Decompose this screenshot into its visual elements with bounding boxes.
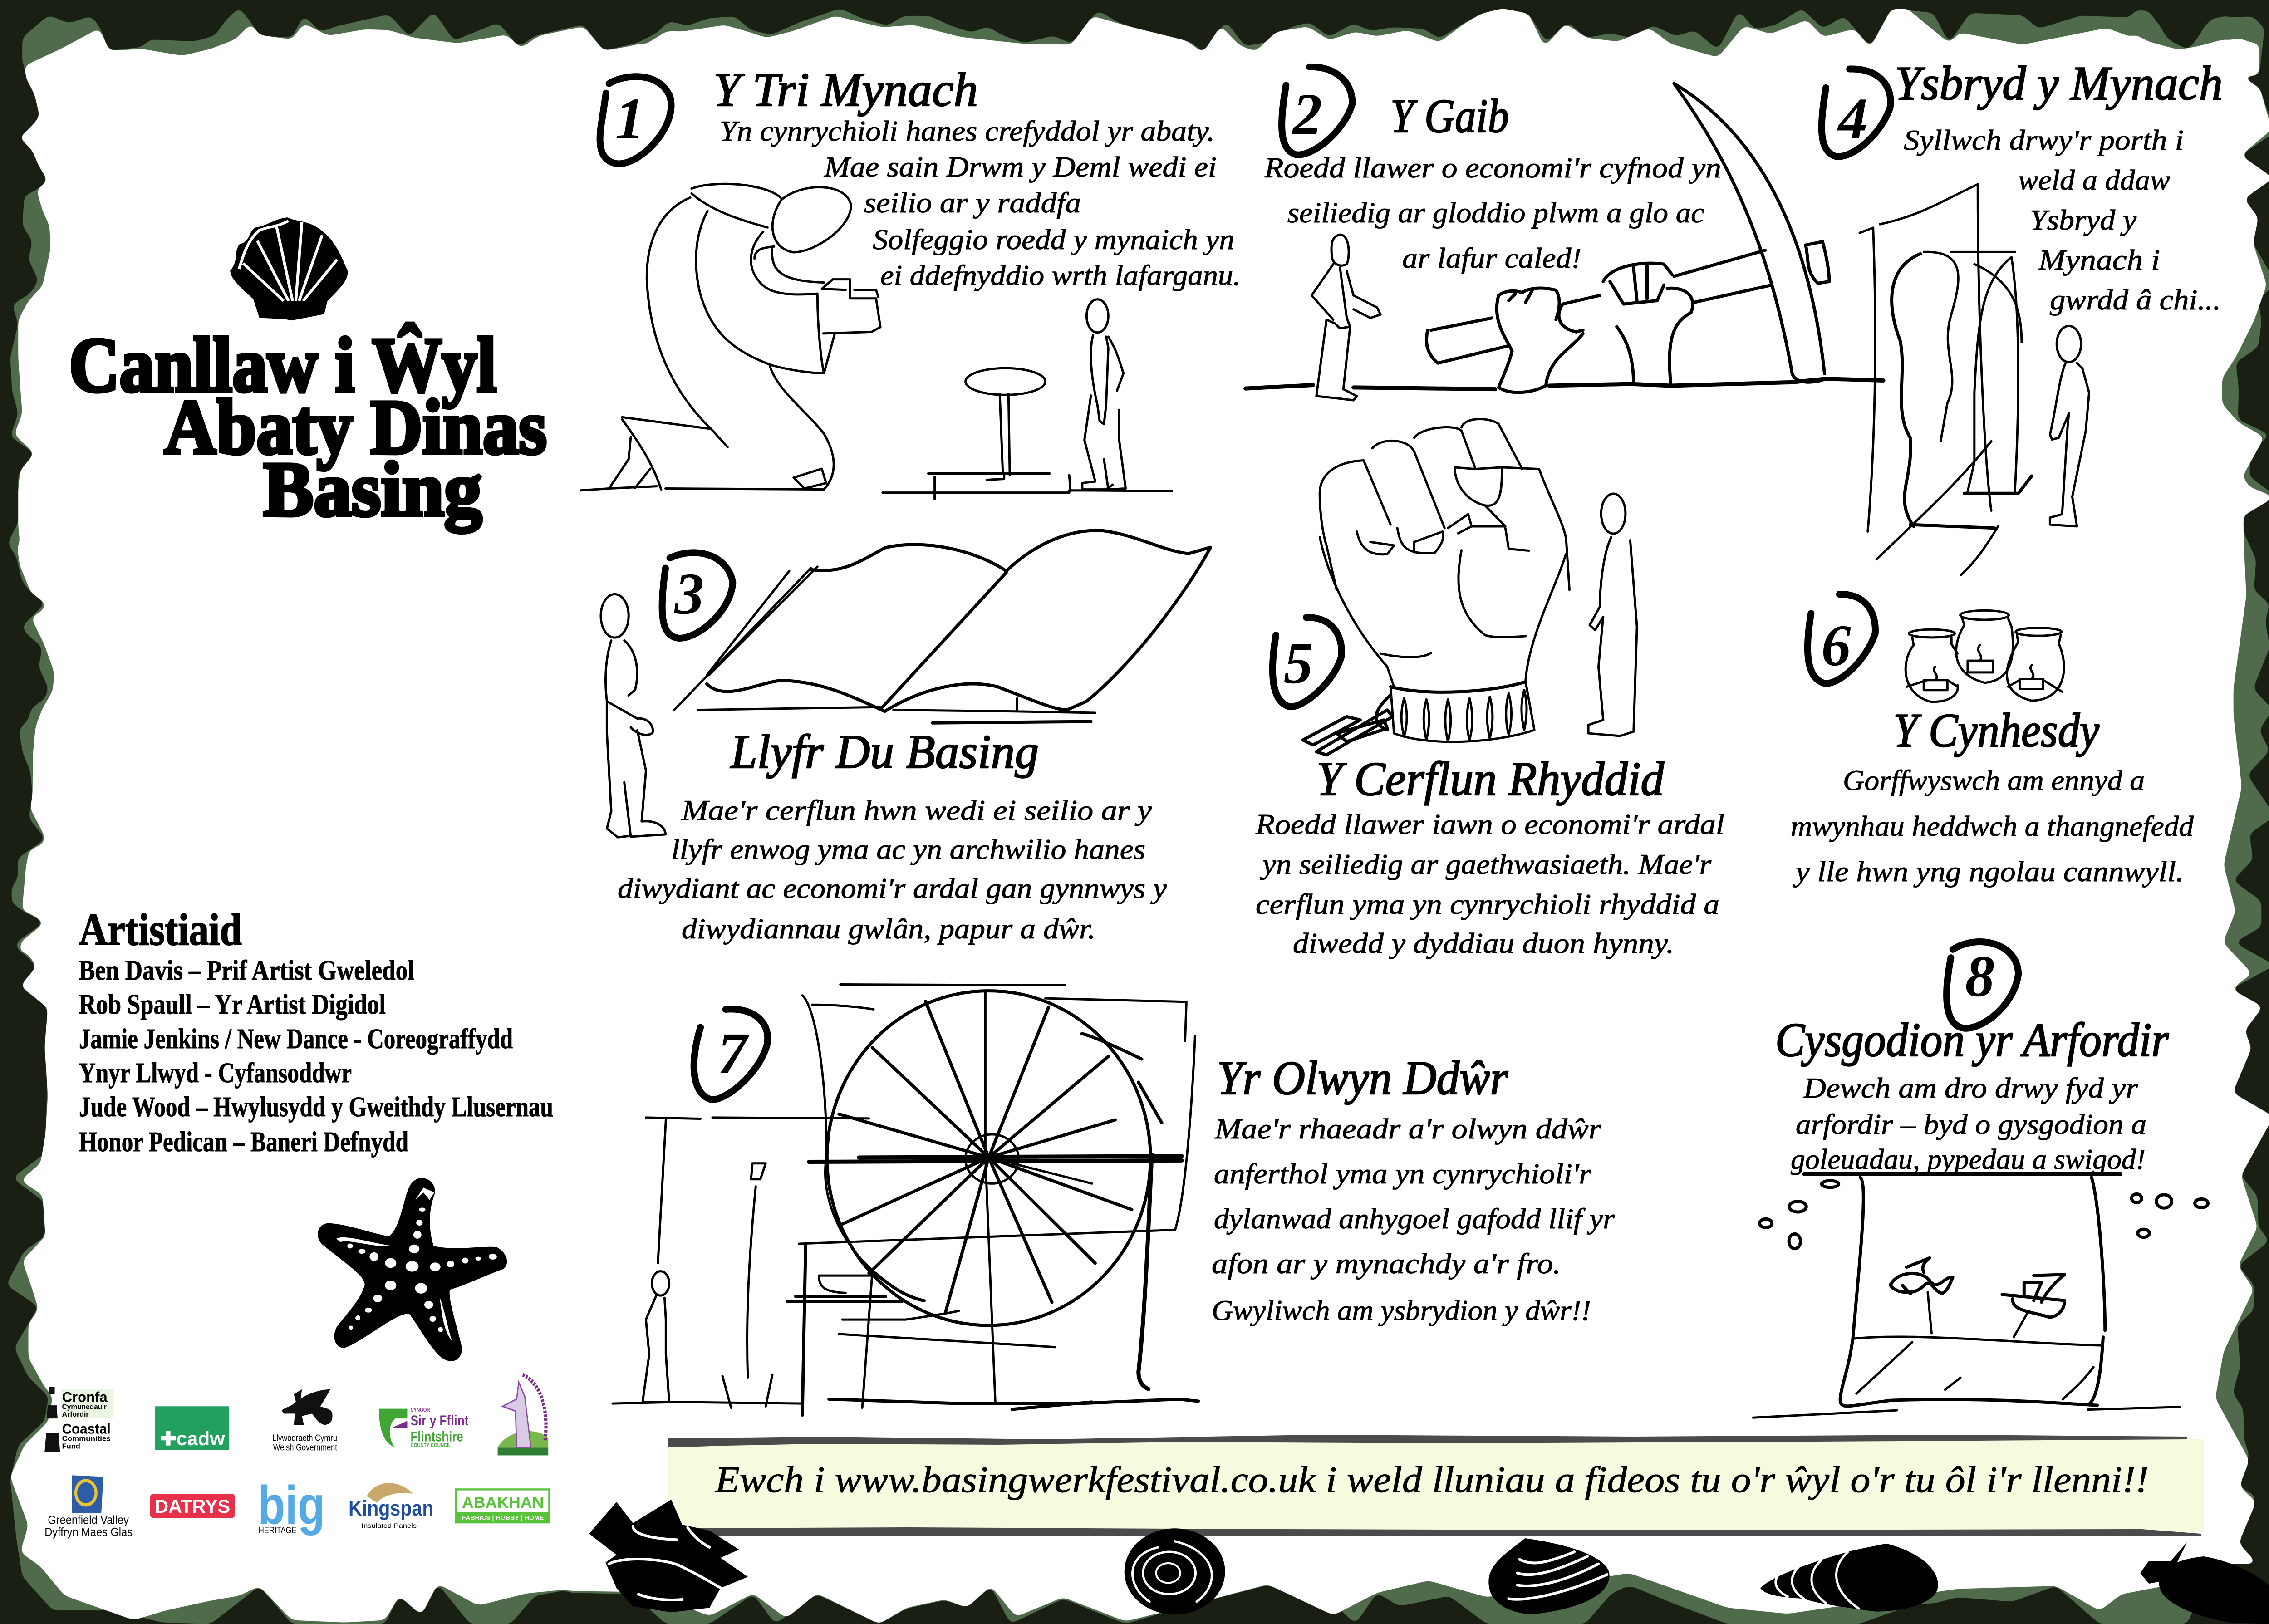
body text: mwynhau heddwch a thangnefedd [1791, 810, 2194, 842]
panel 4: Ysbryd y Mynach [1822, 57, 2223, 575]
artists list: Ynyr Llwyd - Cyfansoddwr [79, 1058, 352, 1089]
sketch: water wheel and visitor [613, 985, 1198, 1415]
panel 8: Cysgodion yr Arfordir [1753, 942, 2208, 1418]
body text [1791, 764, 2194, 888]
body text: Gwyliwch am ysbrydion y dŵr!! [1212, 1294, 1591, 1326]
logo: Coastal Communities Fund: Cymunedau'r [62, 1403, 107, 1411]
panel 2: Y Gaib [1246, 67, 1883, 400]
number badge 3 [662, 553, 733, 638]
number badge 8 [1947, 942, 2019, 1028]
panel 5: Y Cerflun Rhyddid [1255, 419, 1724, 959]
artists list: Artistiaid [79, 904, 242, 955]
sketch: three candle jars [1906, 610, 2064, 702]
logo: Cadw [155, 1406, 229, 1450]
artists list: Jude Wood – Hwylusydd y Gweithdy Llusernau [79, 1092, 553, 1123]
title: Abaty Dinas [164, 384, 547, 471]
body text: Mae sain Drwm y Deml wedi ei [824, 151, 1217, 183]
number badge 3: 3 [673, 561, 704, 627]
body text: Mynach i [2038, 244, 2160, 276]
sketch: kneeling monk, singing bowl and visitor [581, 184, 1172, 499]
sketch: ghost in portal and visitor [1860, 184, 2089, 575]
icon: spiked conch shell [589, 1500, 748, 1612]
artists list: Jamie Jenkins / New Dance - Coreograffydd [79, 1024, 513, 1055]
heading: Llyfr Du Basing [730, 725, 1039, 778]
number badge 6: 6 [1822, 613, 1851, 678]
body text: diwydiannau gwlân, papur a dŵr. [682, 913, 1095, 945]
number badge 4 [1822, 69, 1891, 157]
body text: llyfr enwog yma ac yn archwilio hanes [671, 833, 1145, 865]
body text: seilio ar y raddfa [864, 186, 1081, 219]
number badge 1 [600, 77, 671, 164]
body text: Yn cynrychioli hanes crefyddol yr abaty. [720, 115, 1215, 147]
body text [618, 794, 1167, 945]
logo: Abakhan: FABRICS | HOBBY | HOME [462, 1514, 544, 1521]
logo: Datrys [150, 1494, 235, 1518]
body text [1791, 1072, 2146, 1175]
number badge 7: 7 [718, 1021, 750, 1086]
body text: Gorffwyswch am ennyd a [1843, 764, 2145, 796]
sketch: open book sculpture and visitor [601, 530, 1210, 837]
heading: Y Gaib [1390, 89, 1509, 142]
sketch: wrist shackle, chain and visitor [1303, 494, 1637, 755]
icon: clam shell [1488, 1538, 1610, 1614]
panel 7: Yr Olwyn Ddŵr [613, 985, 1615, 1415]
body text [1212, 1113, 1615, 1326]
body text: Ysbryd y [2030, 204, 2137, 236]
logo: Abakhan [456, 1489, 549, 1522]
heading: Y Tri Mynach [713, 63, 978, 116]
title [69, 322, 547, 533]
title: Basing [263, 446, 482, 533]
body text [1904, 124, 2221, 316]
number badge 2 [1282, 67, 1352, 155]
icon: large shell at corner [2140, 1542, 2269, 1624]
panel 1: Y Tri Mynach [581, 63, 1241, 499]
body text: afon ar y mynachdy a'r fro. [1212, 1247, 1561, 1280]
logo: Welsh Government: Llywodraeth Cymru [272, 1433, 337, 1443]
body text: gwrdd â chi... [2050, 284, 2221, 316]
title: Canllaw i Ŵyl [69, 322, 496, 408]
logo: Welsh Government [272, 1389, 338, 1452]
logo: Greenfield Valley: Greenfield Valley [48, 1514, 129, 1527]
heading: Cysgodion yr Arfordir [1775, 1013, 2169, 1066]
panel 3: Llyfr Du Basing [601, 530, 1210, 945]
logo: Flintshire: Flintshire [411, 1429, 463, 1445]
website banner [668, 1435, 2204, 1536]
body text: goleuadau, pypedau a swigod! [1791, 1143, 2146, 1175]
body text: Dewch am dro drwy fyd yr [1803, 1072, 2138, 1104]
logo: Coastal Communities Fund: Coastal [62, 1421, 111, 1437]
logo: arts figure [498, 1375, 548, 1455]
body text: Mae'r rhaeadr a'r olwyn ddŵr [1214, 1113, 1601, 1145]
body text [1264, 152, 1721, 274]
number badge 8: 8 [1965, 944, 1995, 1009]
body text: Mae'r cerflun hwn wedi ei seilio ar y [681, 794, 1152, 826]
artists list: Rob Spaull – Yr Artist Digidol [79, 989, 386, 1020]
body text: Syllwch drwy'r porth i [1904, 124, 2184, 156]
body text: diwedd y dyddiau duon hynny. [1293, 927, 1674, 959]
body text: Roedd llawer iawn o economi'r ardal [1255, 808, 1724, 840]
body text: yn seiliedig ar gaethwasiaeth. Mae'r [1260, 848, 1712, 880]
logo: Kingspan [349, 1483, 434, 1529]
logo: Cadw: ✚cadw [160, 1428, 225, 1450]
heading: Yr Olwyn Ddŵr [1217, 1051, 1508, 1104]
heading: Y Cynhesdy [1893, 704, 2100, 757]
number badge 7 [694, 1009, 768, 1100]
artists list: Honor Pedican – Baneri Defnydd [79, 1127, 408, 1158]
sketch: shadow puppet tank, fish, boat and bubbles [1753, 1174, 2208, 1418]
body text [720, 115, 1241, 291]
logo: Coastal Communities Fund: Communities [62, 1435, 111, 1443]
artists list: Ben Davis – Prif Artist Gweledol [79, 955, 414, 986]
sketch: clenched fist [1320, 419, 1569, 590]
body text: Roedd llawer o economi'r cyfnod yn [1264, 152, 1721, 184]
logo: Coastal Communities Fund: Fund [62, 1442, 80, 1451]
logo: Flintshire: CYNGOR [411, 1407, 430, 1413]
website banner: Ewch i www.basingwerkfestival.co.uk i weld lluniau a fideos tu o'r ŵyl o'r tu ôl i'r llenni!! [715, 1459, 2149, 1500]
logo: Coastal Communities Fund: Cronfa [62, 1390, 108, 1405]
logo: Big Heritage: big [258, 1475, 325, 1536]
logo: Flintshire [379, 1407, 469, 1449]
body text: cerflun yma yn cynrychioli rhyddid a [1256, 888, 1719, 920]
logo: Big Heritage: HERITAGE [259, 1525, 297, 1535]
number badge 5: 5 [1283, 631, 1313, 696]
logo: Kingspan: Kingspan [349, 1497, 434, 1521]
body text: ei ddefnyddio wrth lafarganu. [880, 259, 1241, 291]
sketch: pickaxe held by fists and visitor [1246, 83, 1883, 400]
body text: dylanwad anhygoel gafodd llif yr [1214, 1202, 1615, 1235]
body text: diwydiant ac economi'r ardal gan gynnwys y [618, 872, 1167, 904]
icon: whelk shell [1760, 1544, 1938, 1612]
number badge 2: 2 [1292, 82, 1322, 147]
logo: Coastal Communities Fund: Arfordir [62, 1411, 89, 1418]
body text: Solfeggio roedd y mynaich yn [873, 223, 1234, 255]
body text: seiliedig ar gloddio plwm a glo ac [1287, 196, 1704, 229]
sponsor logos [44, 1375, 549, 1539]
heading: Y Cerflun Rhyddid [1316, 752, 1665, 805]
logo: Flintshire: Sir y Fflint [411, 1413, 469, 1429]
logo: Kingspan: Insulated Panels [362, 1522, 417, 1529]
logo: Abakhan: ABAKHAN [462, 1494, 544, 1511]
artists list [79, 904, 553, 1158]
number badge 5 [1272, 618, 1341, 707]
body text: arfordir – byd o gysgodion a [1796, 1108, 2146, 1140]
logo: Greenfield Valley: Dyffryn Maes Glas [44, 1526, 133, 1539]
number badge 6 [1807, 594, 1875, 683]
heading: Ysbryd y Mynach [1895, 57, 2223, 110]
body text: y lle hwn yng ngolau cannwyll. [1793, 855, 2184, 888]
icon: spiral snail shell [1125, 1528, 1225, 1614]
body text: anferthol yma yn cynrychioli'r [1214, 1158, 1591, 1190]
number badge 1: 1 [615, 86, 644, 152]
body text: weld a ddaw [2018, 164, 2170, 196]
number badge 4: 4 [1837, 86, 1868, 152]
logo: Greenfield Valley [44, 1475, 133, 1539]
icon: scallop shell [230, 217, 348, 320]
logo: Coastal Communities Fund [44, 1387, 113, 1452]
panel 6: Y Cynhesdy [1791, 594, 2194, 888]
body text: ar lafur caled! [1402, 242, 1581, 274]
logo: Welsh Government: Welsh Government [273, 1442, 338, 1452]
icon: starfish [318, 1178, 507, 1361]
logo: Flintshire: COUNTY COUNCIL [411, 1442, 451, 1449]
body text [1255, 808, 1724, 959]
logo: Datrys: DATRYS [155, 1496, 230, 1517]
bottom sea shells [589, 1500, 2269, 1624]
